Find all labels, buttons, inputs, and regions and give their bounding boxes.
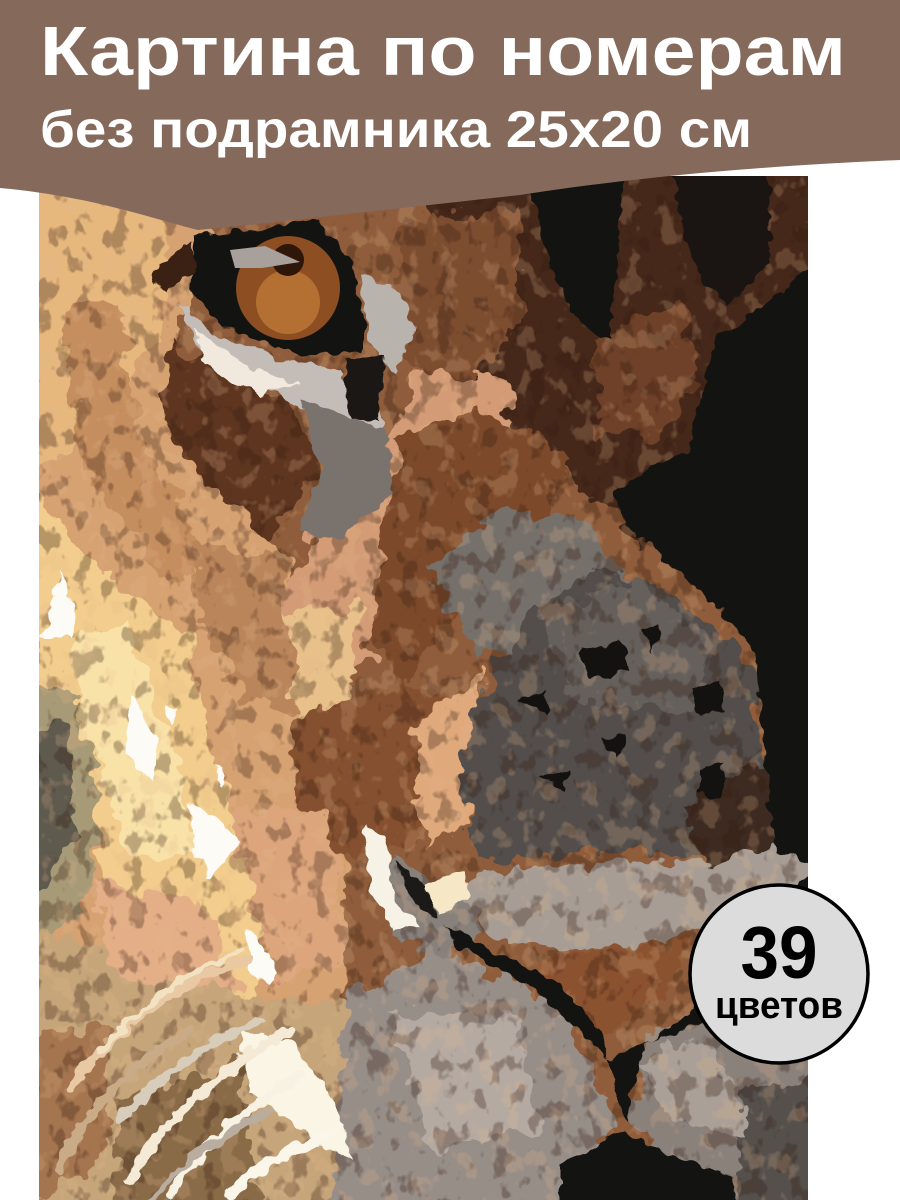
eye upper-left accent [150,240,195,295]
muzzle light band [462,842,808,952]
upper right dark brown fur [426,176,808,551]
mouth black [445,860,830,1125]
white highlights [42,568,78,640]
eye lower rim white [178,304,386,429]
lower white fur [240,1030,350,1160]
pink central stripe [285,370,510,700]
left tan area [20,160,345,1200]
eye socket [190,222,365,355]
lower left tan fur [20,930,350,1200]
iris [230,236,340,340]
tear duct grey [300,400,395,540]
painting: lion face close-up [20,160,830,1200]
grey band above nose [430,510,640,660]
dark brown nose side [684,762,776,870]
title line 2: без подрамника 25х20 см [40,101,752,159]
whiskers and light fur strokes [60,950,330,1200]
nostril [395,860,440,920]
yellow highlights left [30,490,265,1000]
dark under-eye zone [160,345,320,540]
badge: 39 colours: цветов [715,985,843,1027]
left nose shadow [390,860,490,960]
lower muzzle right [635,1020,830,1200]
olive grey left edge [39,686,104,934]
header banner [0,0,900,230]
grey nose [460,570,765,860]
black top and right area [530,180,624,340]
eye inner corner grey [362,275,415,375]
badge: 39 colours [690,885,868,1063]
badge: 39 colours: 39 [740,911,818,994]
central brown [370,410,570,700]
black blotches on nose [520,625,725,800]
brown lip [530,945,690,1040]
title line 1: Картина по номерам [40,12,846,90]
paint blotch textures [39,176,808,1200]
white nostril edge [365,826,420,930]
lower muzzle left [330,950,610,1200]
